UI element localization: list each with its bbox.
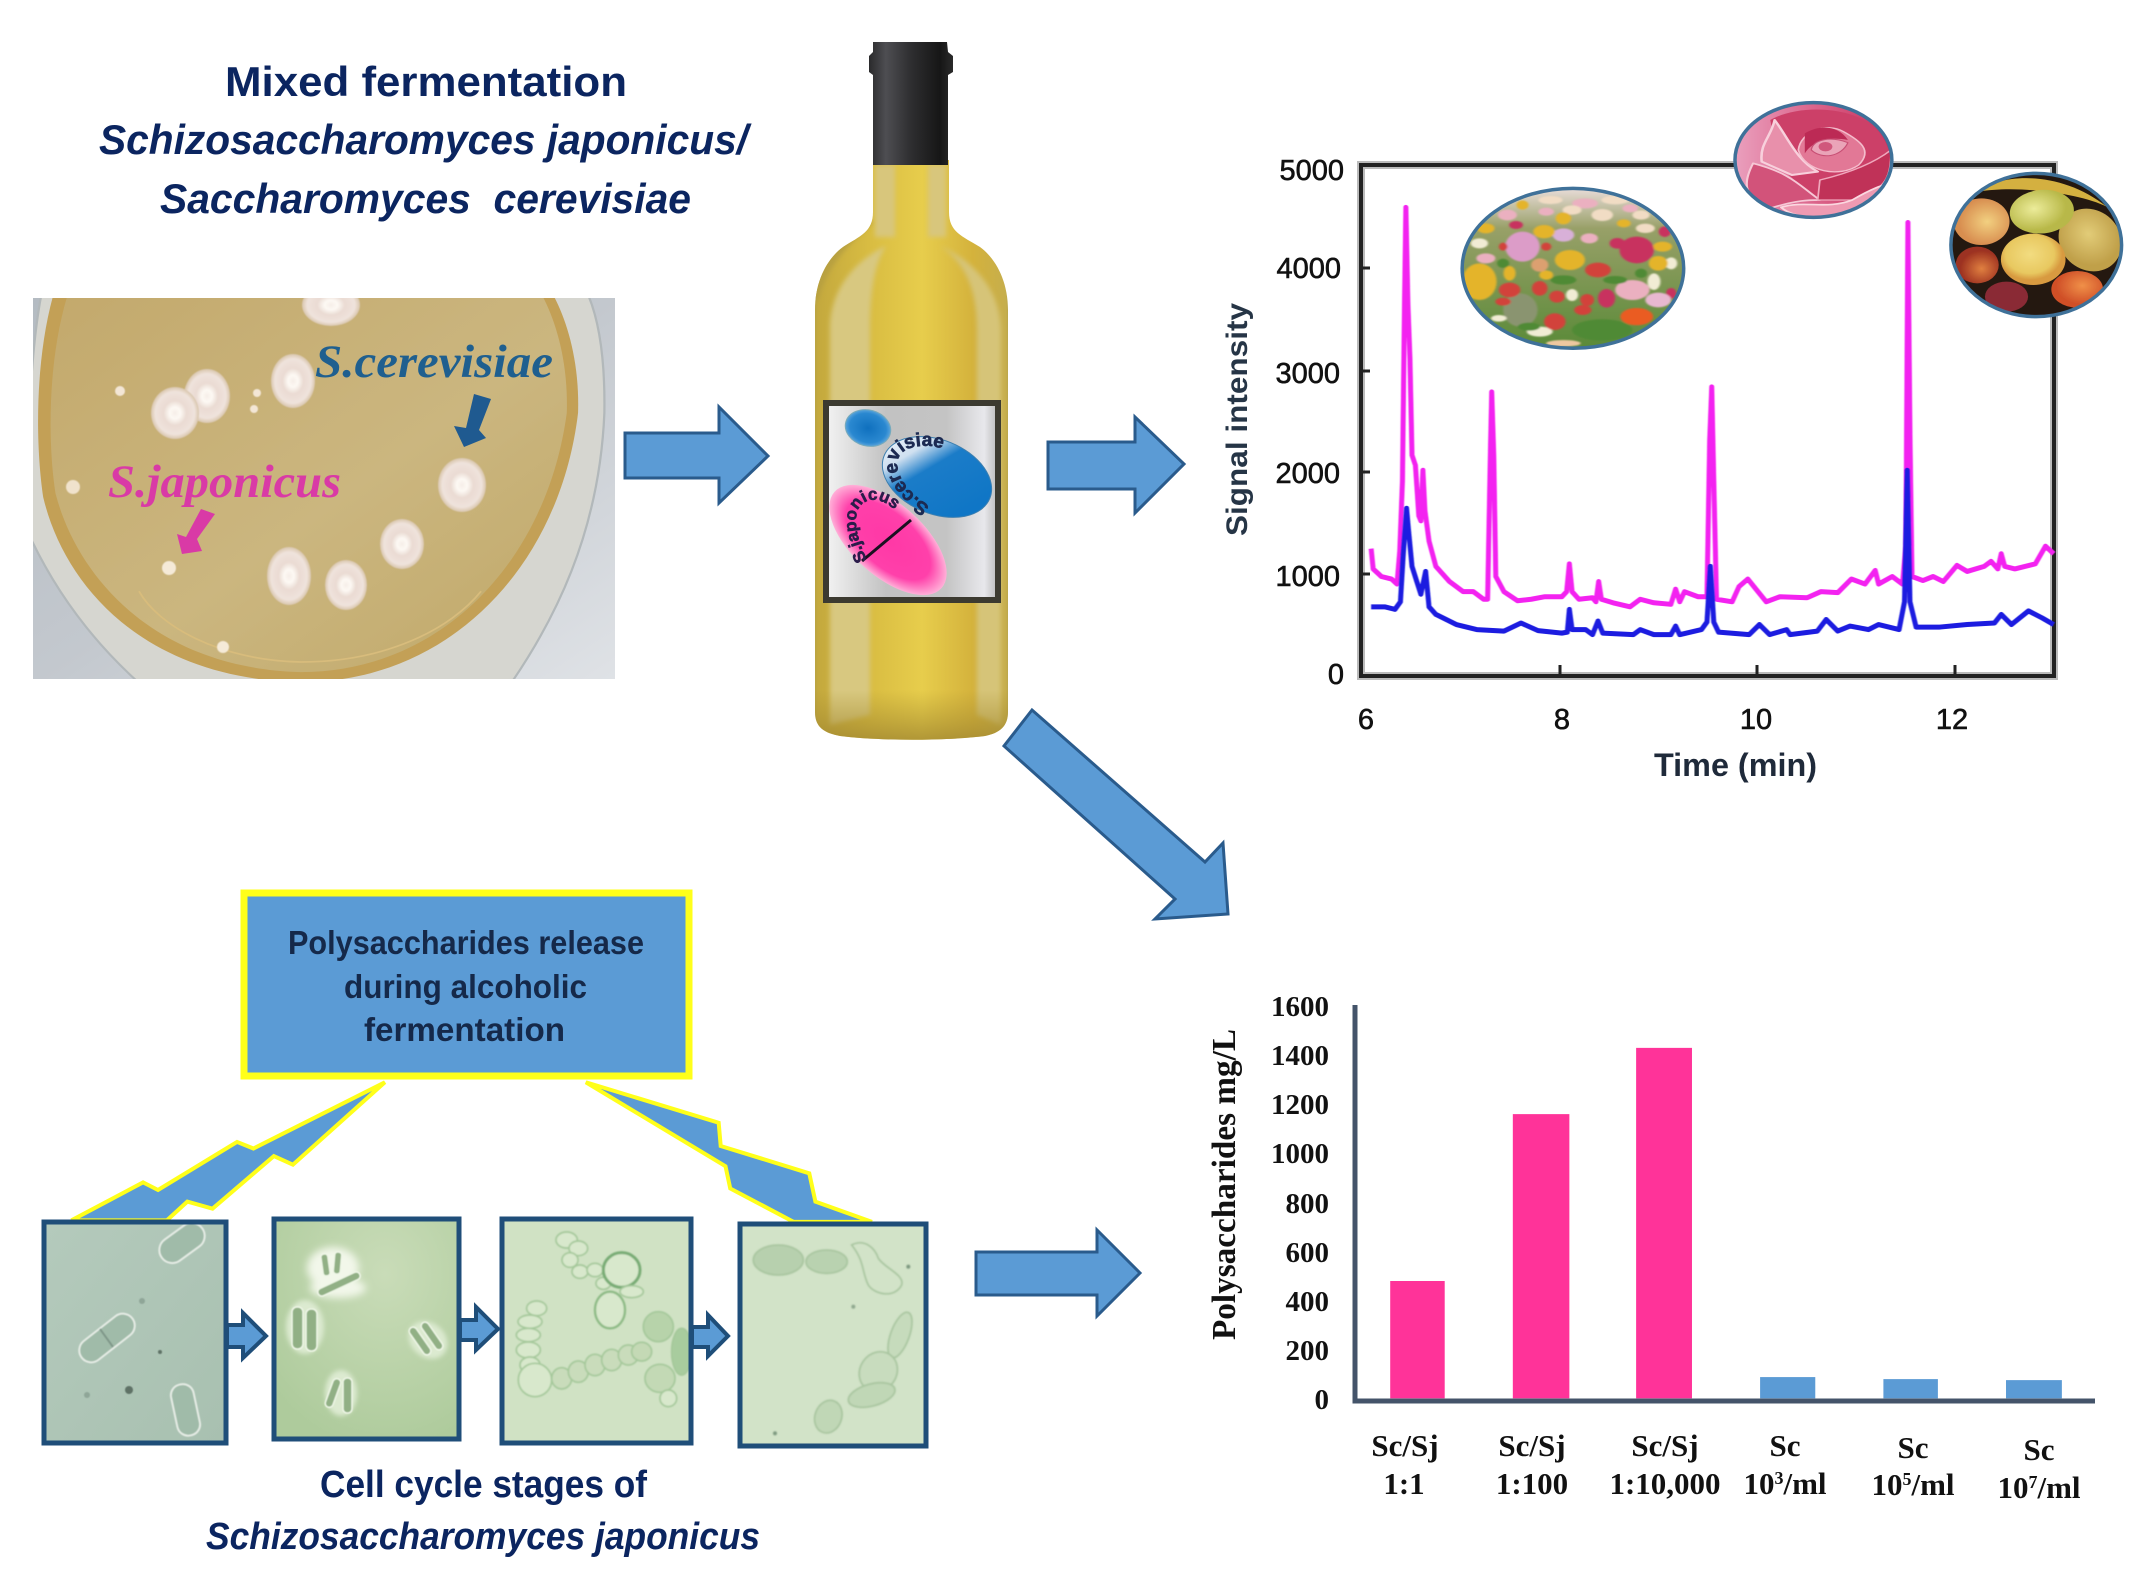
bottle label — [823, 400, 1001, 603]
icon: rose — [1735, 103, 1892, 218]
arrow: stage 2 to 3 — [460, 1307, 498, 1350]
x axis labels: Sc/Sj — [1498, 1428, 1566, 1463]
x axis labels: 1:100 — [1496, 1466, 1568, 1501]
arrow: japonicus — [177, 509, 215, 554]
y axis labels: 1600 — [1271, 991, 1329, 1023]
y axis labels: 600 — [1286, 1237, 1329, 1269]
blue trace — [1371, 470, 2054, 635]
y axis title: Signal intensity — [1221, 303, 1254, 536]
x axis labels: 10 — [1871, 1467, 1902, 1502]
bars — [1390, 1048, 2062, 1398]
micrograph: stage 1 — [44, 1218, 226, 1443]
x axis labels: 5 — [1902, 1469, 1911, 1489]
curved text: S.japonicus: S.japonicus — [846, 490, 899, 563]
x axis labels — [1358, 704, 1968, 736]
y axis labels: 0 — [1314, 1384, 1329, 1416]
title — [99, 58, 752, 222]
x axis labels: 1:1 — [1383, 1466, 1425, 1501]
icon: flower field — [1462, 188, 1684, 348]
y axis labels — [1271, 991, 1329, 1416]
x axis labels: 12 — [1936, 704, 1968, 736]
micrograph: stage 2 — [274, 1219, 459, 1439]
x axis labels: Sc — [1898, 1430, 1928, 1465]
bottle cap — [869, 42, 953, 165]
arrow: micrographs to bar chart — [976, 1230, 1140, 1316]
large yeast cell — [870, 421, 1004, 533]
magenta trace — [1371, 207, 2054, 607]
colonies — [66, 284, 486, 653]
title: Schizosaccharomyces japonicus/ — [99, 116, 752, 163]
fission yeast cell — [810, 465, 966, 615]
arrow: bottle to chromatogram — [1048, 417, 1184, 513]
label: S.cerevisiae: S.cerevisiae — [315, 336, 553, 388]
x axis labels: 10 — [1743, 1466, 1774, 1501]
arrow: stage 1 to 2 — [227, 1313, 266, 1358]
y axis labels: 200 — [1286, 1335, 1329, 1367]
chart: polysaccharides bar chart — [1206, 991, 2095, 1505]
caption: cell cycle stages: Cell cycle stages of — [320, 1464, 647, 1506]
x axis labels: Sc/Sj — [1631, 1428, 1699, 1463]
lightning connector: left — [72, 1082, 385, 1220]
arrow: bottle to bar chart — [1004, 710, 1228, 919]
lightning connector: right — [586, 1082, 872, 1222]
axis ticks — [1361, 268, 1955, 676]
septum line — [862, 520, 911, 561]
x axis labels: 3 — [1774, 1468, 1783, 1488]
arrow: plate to bottle — [625, 407, 768, 503]
x axis labels: 6 — [1358, 704, 1374, 736]
y axis labels: 3000 — [1275, 358, 1340, 390]
micrograph: stage 4 — [740, 1224, 926, 1446]
x axis labels: Sc — [1770, 1428, 1800, 1463]
panel: petri dish photo — [28, 284, 615, 699]
callout: polysaccharides release: during alcoholic — [344, 968, 587, 1005]
icon: fruit — [1951, 173, 2129, 317]
callout: polysaccharides release — [244, 893, 689, 1076]
y axis labels: 0 — [1328, 659, 1344, 691]
y axis labels — [1275, 155, 1344, 691]
micrograph: stage 3 — [502, 1219, 692, 1443]
x axis labels: /ml — [2036, 1470, 2081, 1505]
plot frame — [1361, 165, 2054, 676]
y axis labels: 800 — [1286, 1188, 1329, 1220]
curved text: S.cerevisiae: S.cerevisiae — [887, 432, 944, 516]
x axis labels: Sc/Sj — [1371, 1428, 1439, 1463]
arrow: stage 3 to 4 — [692, 1315, 728, 1356]
callout: polysaccharides release: Polysaccharides release — [288, 924, 644, 961]
y axis title: Polysaccharides mg/L — [1206, 1029, 1243, 1340]
caption: cell cycle stages: Schizosaccharomyces japonicus — [206, 1516, 760, 1558]
y axis labels: 5000 — [1279, 155, 1344, 187]
bottle — [815, 42, 1008, 740]
x axis labels: /ml — [1782, 1466, 1827, 1501]
x axis labels: Sc — [2024, 1432, 2054, 1467]
label: S.japonicus: S.japonicus — [108, 456, 341, 508]
x axis labels — [1371, 1428, 2081, 1505]
arrow: cerevisiae — [454, 394, 491, 447]
chart: chromatogram — [1221, 155, 2054, 783]
x axis labels: 10 — [1997, 1470, 2028, 1505]
x axis labels: 8 — [1554, 704, 1570, 736]
y axis labels: 1200 — [1271, 1089, 1329, 1121]
y axis labels: 1400 — [1271, 1040, 1329, 1072]
y axis labels: 400 — [1286, 1286, 1329, 1318]
y axis labels: 1000 — [1275, 561, 1340, 593]
title: Mixed fermentation — [225, 58, 627, 105]
x axis title: Time (min) — [1654, 747, 1817, 783]
x axis labels: 1:10,000 — [1609, 1466, 1721, 1501]
caption: cell cycle stages — [206, 1464, 760, 1558]
x axis labels: /ml — [1910, 1467, 1955, 1502]
x axis labels: 10 — [1740, 704, 1772, 736]
bottle body — [808, 160, 1014, 750]
y axis labels: 1000 — [1271, 1138, 1329, 1170]
callout: polysaccharides release: fermentation — [364, 1011, 565, 1048]
y axis labels: 2000 — [1275, 458, 1340, 490]
axes — [1355, 1005, 2095, 1401]
title: Saccharomyces cerevisiae — [160, 175, 691, 222]
y axis labels: 4000 — [1276, 253, 1341, 285]
x axis labels: 7 — [2028, 1472, 2037, 1492]
small yeast bud — [841, 405, 895, 451]
